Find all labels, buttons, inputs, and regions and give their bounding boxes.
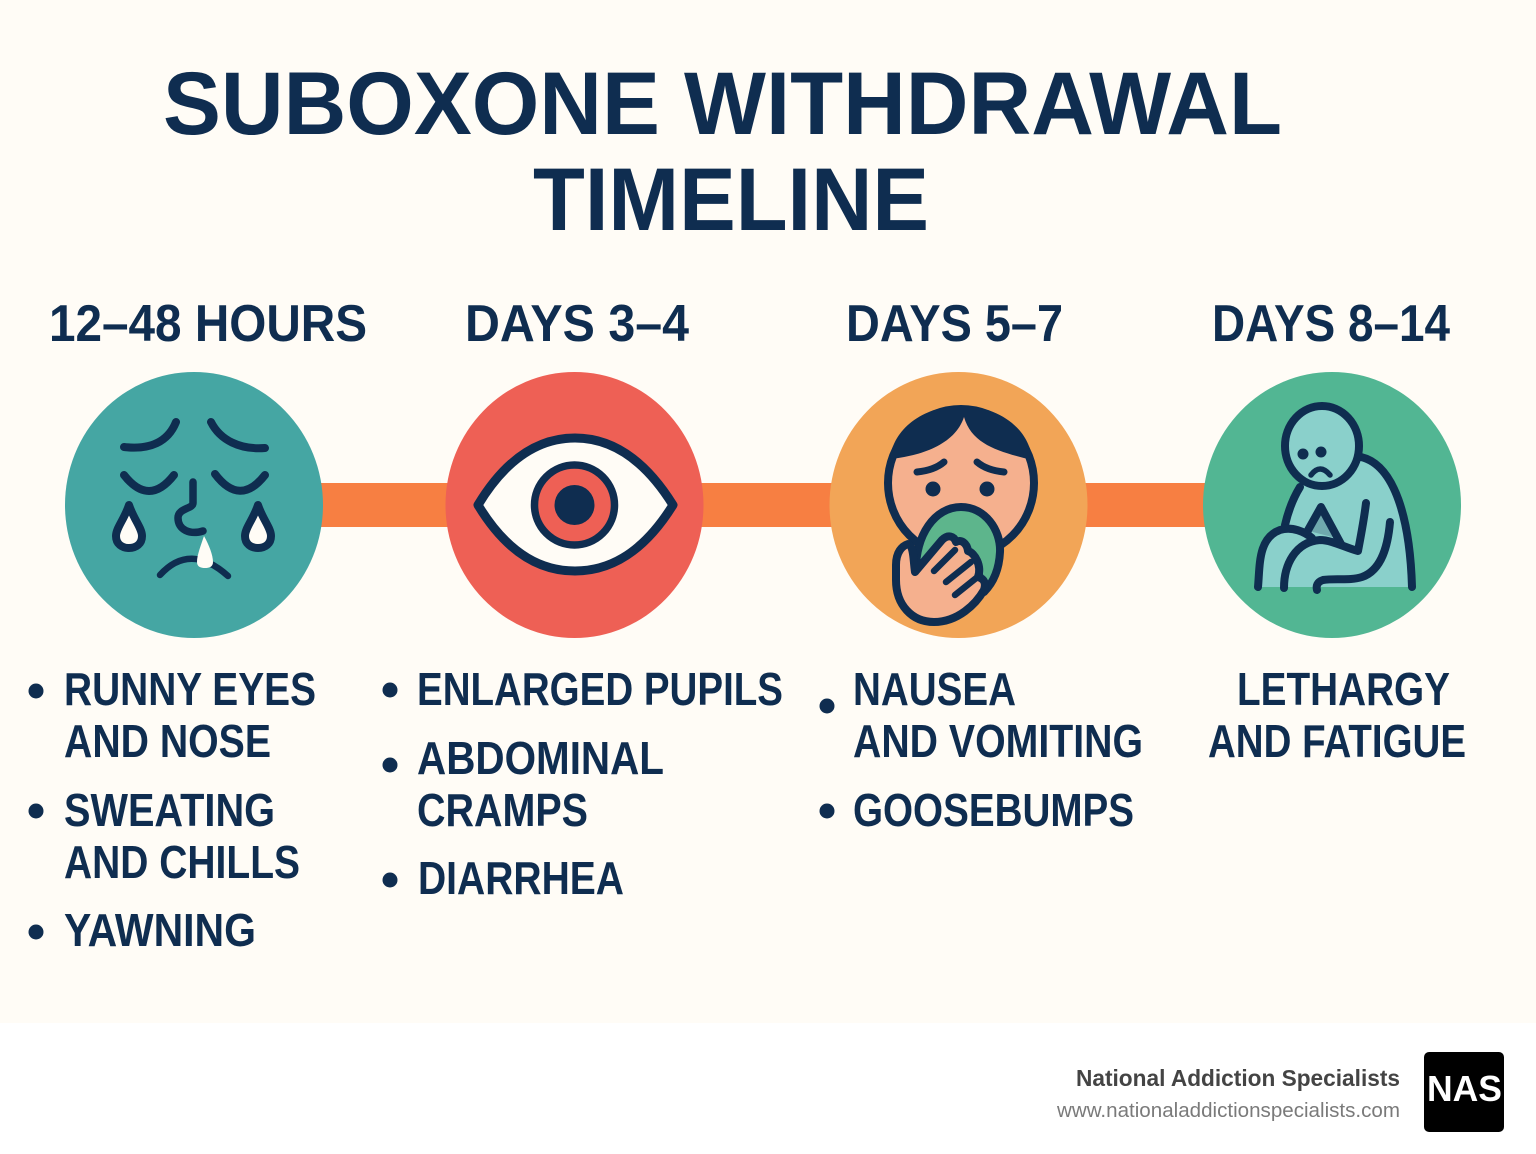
- symptom list: 12-48 hours: RUNNY EYES: [64, 663, 316, 715]
- symptom list: days 8-14: [1208, 663, 1466, 767]
- heading: days 3-4: DAYS 3–4: [465, 295, 689, 353]
- symptom list: 12-48 hours: [28, 663, 316, 956]
- panel: days 5-7: [820, 295, 1143, 836]
- icon: nauseous person covering mouth: [830, 372, 1088, 638]
- symptom list: days 5-7: [820, 663, 1143, 836]
- logo: NAS: NAS: [1427, 1068, 1502, 1109]
- footer: organisation name and website: [1056, 1065, 1400, 1122]
- symptom list: days 3-4: [382, 663, 783, 904]
- icon: eye with enlarged pupil: [446, 372, 704, 638]
- symptom list: days 3-4: CRAMPS: [417, 784, 588, 836]
- symptom list: 12-48 hours: AND NOSE: [64, 715, 271, 767]
- panel: days 3-4: [382, 295, 783, 904]
- symptom list: 12-48 hours: SWEATING: [64, 784, 275, 836]
- panel: 12-48 hours: [28, 295, 367, 956]
- title: [163, 53, 1282, 249]
- heading: days 5-7: DAYS 5–7: [846, 295, 1063, 353]
- symptom list: days 8-14: LETHARGY: [1237, 663, 1450, 715]
- heading: days 8-14: DAYS 8–14: [1212, 295, 1450, 353]
- symptom list: days 5-7: AND VOMITING: [853, 715, 1143, 767]
- footer: organisation name and website: National Addiction Specialists: [1076, 1065, 1400, 1091]
- timeline connector bar: [315, 483, 1215, 527]
- symptom list: days 5-7: GOOSEBUMPS: [853, 784, 1134, 836]
- title: TIMELINE: [533, 149, 929, 249]
- footer: organisation name and website: www.nationaladdictionspecialists.com: [1056, 1100, 1400, 1122]
- symptom list: 12-48 hours: AND CHILLS: [64, 836, 300, 888]
- symptom list: days 3-4: ABDOMINAL: [417, 732, 664, 784]
- symptom list: days 8-14: AND FATIGUE: [1208, 715, 1466, 767]
- logo: NAS: [1424, 1052, 1504, 1132]
- icon: fatigued seated person: [1203, 372, 1461, 638]
- symptom list: 12-48 hours: YAWNING: [64, 904, 256, 956]
- symptom list: days 5-7: NAUSEA: [853, 663, 1016, 715]
- symptom list: days 3-4: ENLARGED PUPILS: [417, 663, 783, 715]
- title: SUBOXONE WITHDRAWAL: [163, 53, 1282, 153]
- symptom list: days 3-4: DIARRHEA: [418, 852, 624, 904]
- heading: 12-48 hours: 12–48 HOURS: [49, 295, 367, 353]
- panel: days 8-14: [1203, 295, 1466, 767]
- icon: crying face with runny nose: [65, 372, 323, 638]
